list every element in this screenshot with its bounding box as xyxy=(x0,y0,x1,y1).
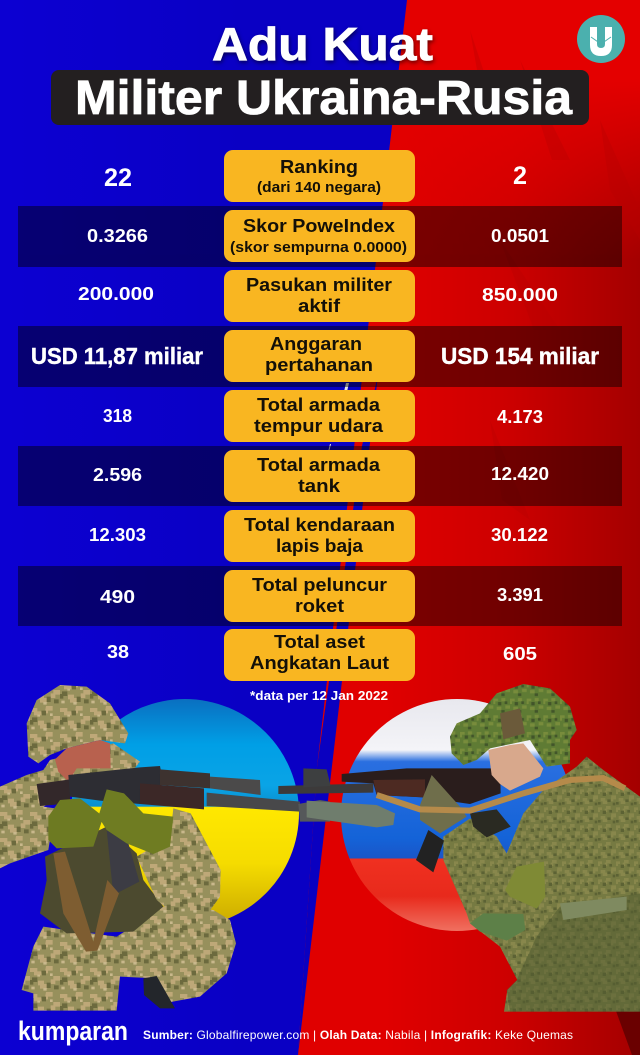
Ukraine values: 318 xyxy=(103,406,132,426)
category labels: Total aset xyxy=(274,631,365,652)
body xyxy=(443,757,640,1012)
category labels: Total armada xyxy=(257,454,381,475)
vest darker xyxy=(507,893,640,1012)
category labels: Angkatan Laut xyxy=(250,652,389,673)
Ukraine values: 0.3266 xyxy=(87,226,148,246)
soldier: Ukraine xyxy=(0,685,330,1011)
helmet xyxy=(27,685,128,763)
Ukraine values: 2.596 xyxy=(93,465,142,485)
magazine xyxy=(416,830,444,872)
title xyxy=(51,18,589,125)
Russia values: 605 xyxy=(503,644,537,664)
Russia values: 850.000 xyxy=(482,285,558,305)
source credits: Sumber: Globalfirepower.com | Olah Data: Nabila | Infografik: Keke Quemas xyxy=(143,1028,573,1042)
helmet xyxy=(450,684,577,767)
category labels: Skor PoweIndex xyxy=(243,215,396,236)
flag circle: Russia xyxy=(341,699,573,931)
icon: teal logo xyxy=(577,15,625,63)
category labels: Total peluncur xyxy=(252,574,387,595)
right glove xyxy=(470,809,511,837)
flag circle: Ukraine xyxy=(71,699,299,927)
Ukraine values: 22 xyxy=(104,164,132,192)
Russia values: 2 xyxy=(513,162,527,190)
footnote: *data per 12 Jan 2022 xyxy=(250,688,388,703)
Ukraine values: 12.303 xyxy=(89,525,146,545)
category labels xyxy=(230,156,407,673)
right sleeve xyxy=(137,808,221,917)
Russia values xyxy=(441,162,599,664)
title bar xyxy=(51,70,589,125)
Russia values: 30.122 xyxy=(491,525,548,545)
category labels: lapis baja xyxy=(276,535,364,556)
category pills xyxy=(224,150,415,681)
legs xyxy=(22,907,236,1011)
Russia values: 0.0501 xyxy=(491,226,549,246)
boot xyxy=(143,976,175,1008)
category labels: (dari 140 negara) xyxy=(257,180,381,196)
title line 2: Militer Ukraina-Rusia xyxy=(75,72,572,125)
category labels: Pasukan militer xyxy=(246,274,392,295)
logo: kumparan: kumparan xyxy=(18,1016,128,1046)
belts xyxy=(560,897,627,920)
soldier: Russia xyxy=(278,684,640,1012)
elbow pad xyxy=(470,913,525,941)
face xyxy=(55,740,111,782)
face xyxy=(488,743,543,791)
sling xyxy=(53,852,119,952)
category labels: Ranking xyxy=(280,156,358,177)
Russia values: 3.391 xyxy=(497,585,543,605)
left glove xyxy=(420,775,467,833)
category labels: pertahanan xyxy=(265,354,373,375)
Russia values: USD 154 miliar xyxy=(441,343,599,369)
vest xyxy=(40,827,163,933)
rifle xyxy=(342,768,501,804)
Russia values: 12.420 xyxy=(491,464,549,484)
Ukraine values xyxy=(31,164,203,662)
muzzle xyxy=(307,801,395,827)
category labels: Total armada xyxy=(257,394,381,415)
category labels: tempur udara xyxy=(254,415,384,436)
category labels: (skor sempurna 0.0000) xyxy=(230,240,407,256)
arm patch xyxy=(505,862,545,909)
gloves xyxy=(48,798,103,848)
Ukraine values: USD 11,87 miliar xyxy=(31,343,203,369)
Ukraine values: 200.000 xyxy=(78,284,154,304)
body and arm camo xyxy=(0,743,140,868)
Ukraine values: 490 xyxy=(100,587,135,607)
darker table bands xyxy=(18,206,622,626)
Ukraine values: 38 xyxy=(107,642,129,662)
category labels: roket xyxy=(295,595,344,616)
Russia values: 4.173 xyxy=(497,407,543,427)
sling xyxy=(377,778,625,811)
category labels: Anggaran xyxy=(270,333,362,354)
title line 1: Adu Kuat xyxy=(212,18,433,70)
category labels: tank xyxy=(298,475,341,496)
rifle xyxy=(37,779,70,806)
mount xyxy=(500,708,525,739)
category labels: Total kendaraan xyxy=(244,514,395,535)
magazine xyxy=(107,830,139,895)
category labels: aktif xyxy=(298,295,341,316)
